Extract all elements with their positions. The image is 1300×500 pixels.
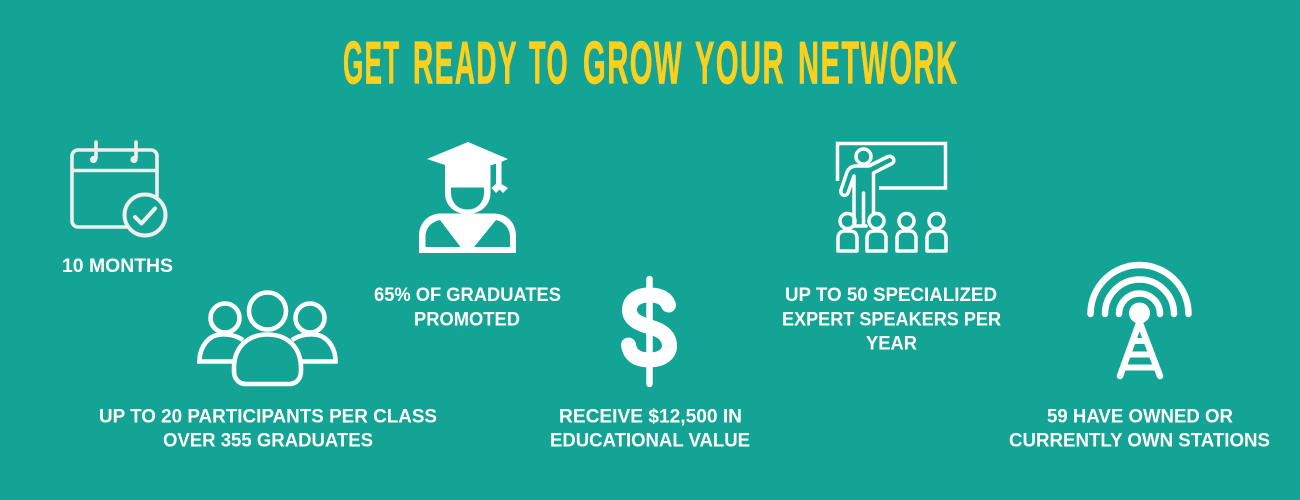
panel: educational value	[550, 279, 750, 452]
label: participants: OVER 355 GRADUATES	[163, 430, 373, 452]
icon: calendar with check	[72, 142, 166, 236]
icon: graduate	[419, 142, 516, 253]
panel: graduates promoted	[374, 142, 561, 330]
label: participants: UP TO 20 PARTICIPANTS PER CLASS	[99, 406, 437, 428]
label: graduates promoted	[374, 285, 561, 330]
label: participants	[99, 406, 437, 452]
icon: speaker at board with audience	[838, 144, 946, 251]
title: GET	[343, 30, 400, 96]
label: graduates promoted: PROMOTED	[414, 310, 520, 330]
label: station owners: 59 HAVE OWNED OR	[1047, 406, 1233, 428]
icon: broadcast tower	[1090, 265, 1188, 376]
panel: expert speakers	[782, 144, 1001, 354]
label: station owners	[1009, 406, 1270, 452]
title	[343, 30, 958, 96]
label: educational value: EDUCATIONAL VALUE	[550, 430, 750, 452]
title: READY	[413, 30, 518, 96]
label: graduates promoted: 65% OF GRADUATES	[374, 285, 561, 306]
icon: dollar sign	[628, 279, 670, 384]
panel: station owners	[1009, 265, 1270, 452]
icon: group of people	[200, 292, 336, 384]
label: station owners: CURRENTLY OWN STATIONS	[1009, 430, 1270, 452]
panel: participants	[99, 292, 437, 452]
label: expert speakers	[782, 285, 1001, 354]
label: educational value: RECEIVE $12,500 IN	[559, 406, 742, 428]
label: 10 months: 10 MONTHS	[62, 256, 173, 277]
panel: 10 months	[62, 142, 173, 277]
label: expert speakers: YEAR	[866, 334, 917, 354]
label: expert speakers: EXPERT SPEAKERS PER	[782, 310, 1001, 330]
label: expert speakers: UP TO 50 SPECIALIZED	[785, 285, 997, 306]
label: educational value	[550, 406, 750, 452]
text: NETWORK	[798, 30, 958, 96]
title: TO	[529, 30, 569, 96]
title: YOUR	[695, 30, 785, 96]
title: GROW	[583, 30, 683, 96]
